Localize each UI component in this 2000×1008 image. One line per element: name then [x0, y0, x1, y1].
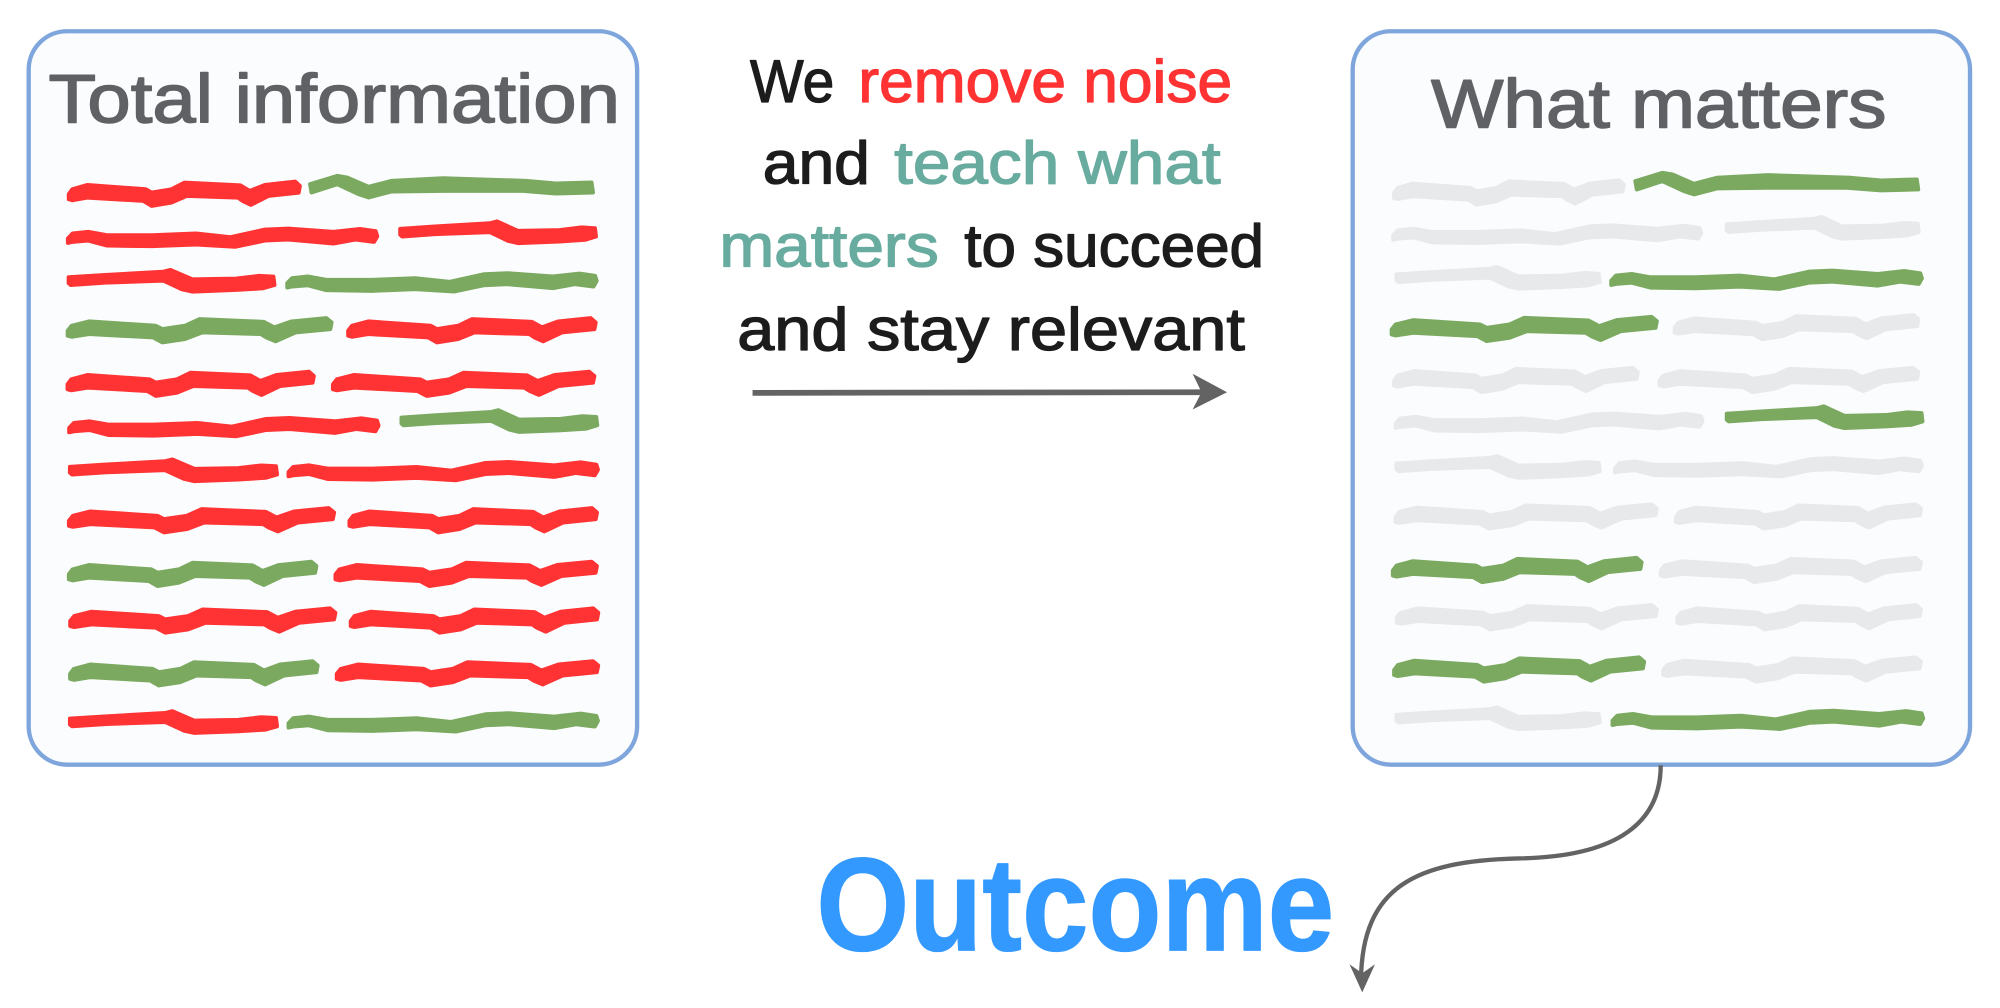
- row 2: [68, 221, 596, 247]
- row 3: [69, 270, 597, 292]
- row 6: [69, 410, 597, 436]
- row 9: [1393, 558, 1921, 582]
- message line 3: matters: [719, 213, 939, 280]
- row 7: [70, 459, 598, 481]
- central message: [719, 48, 1264, 363]
- row 4: [68, 318, 596, 342]
- row 12: [1396, 707, 1923, 729]
- row 3: [1396, 267, 1922, 289]
- row 11: [1394, 657, 1921, 682]
- row 1: [1394, 173, 1918, 205]
- row 8: [69, 508, 597, 532]
- row 1: [69, 176, 593, 206]
- text lines: noise and signal: [68, 176, 598, 733]
- heading: total information: Total information: [48, 60, 620, 137]
- message line 3: to succeed: [964, 213, 1264, 280]
- row 2: [1393, 217, 1919, 244]
- panel: total information: [29, 31, 637, 765]
- heading: what matters: What matters: [1431, 66, 1886, 143]
- row 8: [1395, 504, 1921, 529]
- row 10: [70, 608, 598, 633]
- text lines: filtered: [1392, 173, 1923, 729]
- row 6: [1396, 406, 1922, 432]
- message line 2: teach what: [894, 130, 1221, 197]
- row 7: [1396, 456, 1922, 478]
- message line 1: remove noise: [858, 48, 1232, 115]
- row 5: [1394, 368, 1918, 392]
- row 9: [69, 562, 597, 586]
- message line 1: We: [750, 48, 834, 115]
- row 10: [1397, 605, 1921, 629]
- message line 2: and: [763, 130, 870, 197]
- panel: what matters: [1353, 31, 1970, 765]
- outcome label: Outcome: [816, 831, 1334, 979]
- row 12: [70, 711, 598, 733]
- arrow: to what matters: [753, 374, 1227, 409]
- row 4: [1392, 315, 1918, 341]
- row 11: [70, 661, 598, 685]
- curved arrow: what matters to outcome: [1349, 765, 1661, 992]
- row 5: [68, 372, 594, 396]
- message line 4: and stay relevant: [737, 296, 1245, 363]
